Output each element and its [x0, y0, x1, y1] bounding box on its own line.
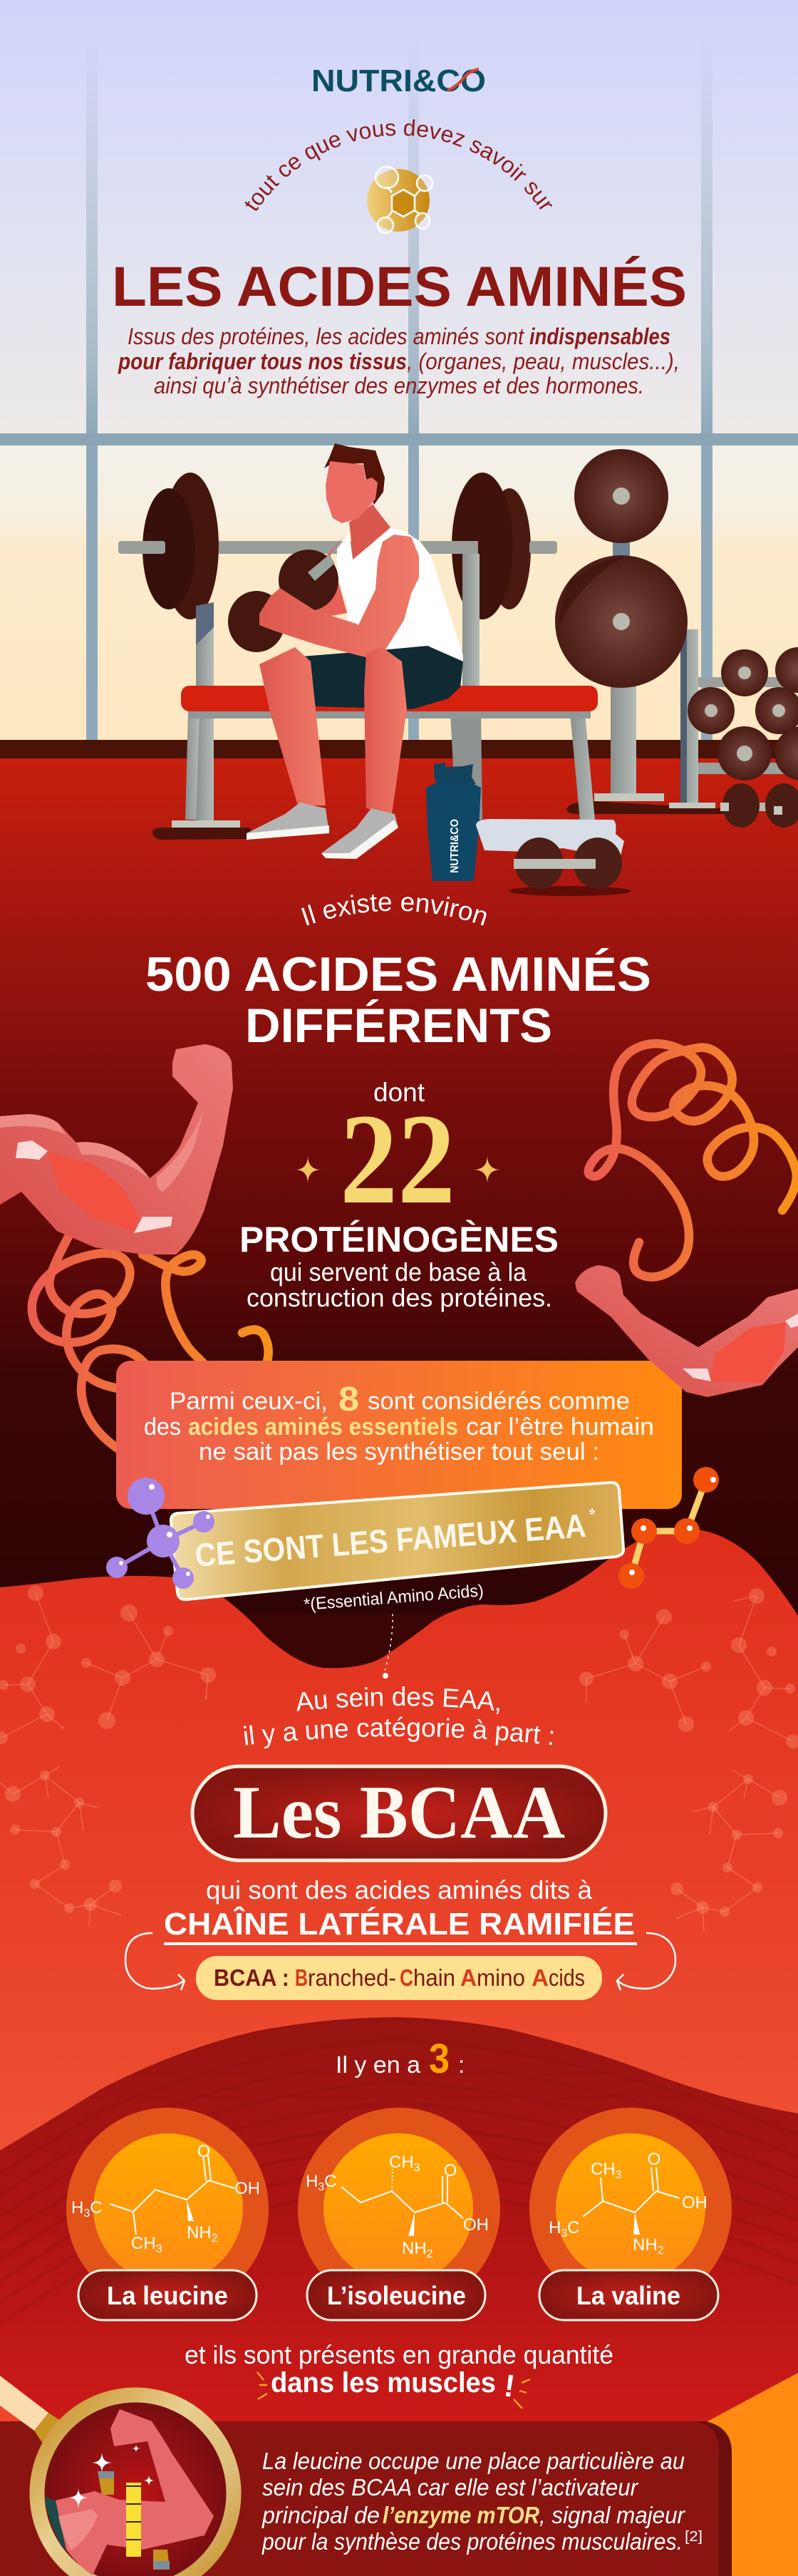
description — [247, 1257, 552, 1312]
BCAA legend pill: C — [400, 1964, 413, 1991]
panel text: ne sait pas les synthétiser tout seul : — [199, 1438, 599, 1465]
magnified arm — [45, 2409, 214, 2575]
left shoe — [247, 803, 329, 840]
red-orange corner left — [0, 2406, 36, 2423]
curved text: au sein des EAA — [244, 1686, 553, 1749]
valine structure: CH — [591, 2160, 616, 2179]
dark red hill — [0, 2017, 798, 2423]
small floor dumbbell — [514, 838, 622, 889]
callout text: principal de — [261, 2502, 380, 2528]
BCAA legend pill: A — [532, 1964, 549, 1991]
panel text: car l’être humain — [466, 1413, 654, 1441]
curved subtitle: tout ce que vous devez savoir sur — [244, 120, 553, 211]
arm muscle — [711, 1322, 786, 1383]
isoleucine structure: O — [444, 2161, 457, 2180]
panel text: acides aminés essentiels — [188, 1413, 458, 1441]
text: dans les muscles — [257, 2367, 530, 2408]
neck — [349, 504, 390, 560]
shaker bottle — [426, 763, 481, 881]
molecule network background — [0, 1585, 798, 1932]
text: acides aminés dits à: qui sont des acides aminés dits à — [206, 1875, 593, 1905]
flexed arm right — [575, 1265, 798, 1397]
heading: chaîne latérale ramifiée: CHAÎNE LATÉRALE RAMIFIÉE — [164, 1906, 635, 1942]
valine label — [539, 2270, 718, 2320]
valine structure: 3 — [561, 2227, 567, 2240]
callout text: sein des BCAA car elle est l’activateur — [262, 2474, 639, 2500]
Les BCAA pill: Les BCAA — [233, 1771, 565, 1854]
intro text: indispensables — [529, 324, 670, 349]
gold banner: CE SONT LES FAMEUX EAA — [194, 1507, 587, 1574]
curved text: au sein des EAA: Au sein des EAA, — [296, 1686, 499, 1714]
protéinogènes: PROTÉINOGÈNES — [239, 1220, 559, 1259]
torso tank top — [337, 528, 463, 663]
sparkles — [68, 2444, 155, 2509]
curved text: au sein des EAA: il y a une catégorie à part : — [244, 1716, 553, 1749]
isoleucine structure: OH — [463, 2215, 489, 2235]
red section blob — [0, 1528, 798, 2423]
BCAA legend pill: BCAA : — [214, 1964, 289, 1991]
near leg — [259, 647, 326, 805]
BCAA legend pill: B — [295, 1964, 308, 1991]
callout text: [2] — [685, 2529, 703, 2545]
valine structure: C — [567, 2218, 580, 2237]
shorts — [293, 646, 463, 709]
barbell — [118, 473, 557, 619]
intro text: , (organes, peau, muscles...), — [407, 349, 680, 374]
panel text: Parmi ceux-ci, — [170, 1388, 328, 1415]
icon: gold molecule — [367, 167, 432, 233]
valine structure: O — [648, 2150, 660, 2169]
gold banner: * — [589, 1504, 596, 1525]
callout text: l’enzyme mTOR — [383, 2502, 539, 2528]
leucine label — [78, 2270, 256, 2320]
panel text — [144, 1381, 654, 1465]
orange corner — [708, 2373, 798, 2576]
leucine structure: 3 — [83, 2207, 90, 2220]
leucine structure — [71, 2142, 260, 2255]
orange info panel — [116, 1361, 682, 1509]
valine label: La valine — [576, 2281, 680, 2310]
valine structure: 3 — [616, 2169, 622, 2181]
man: athlete — [228, 443, 463, 859]
leucine structure: O — [197, 2142, 210, 2161]
squiggle right — [589, 1044, 797, 1277]
logo: NUTRI&CO — [311, 63, 486, 98]
callout text: pour la synthèse des protéines musculaires. — [261, 2528, 683, 2555]
callout text: La leucine occupe une place particulière au — [262, 2448, 685, 2474]
intro text: ainsi qu’à synthétiser des enzymes et des hormones. — [154, 373, 644, 398]
description: qui servent de base à la — [270, 1257, 527, 1287]
isoleucine structure: 3 — [414, 2162, 420, 2174]
window frame — [0, 36, 798, 741]
handle — [0, 2376, 48, 2431]
icon: gold sparkles — [295, 1155, 501, 1184]
isoleucine structure — [306, 2153, 489, 2260]
isoleucine structure: C — [324, 2172, 337, 2191]
isoleucine circle — [298, 2108, 500, 2320]
far leg — [364, 647, 407, 814]
text: il y en a 3 — [336, 2036, 465, 2082]
floor shadows — [152, 801, 727, 896]
front arm — [259, 535, 419, 657]
valine structure: 2 — [658, 2245, 664, 2257]
isoleucine label: L’isoleucine — [327, 2281, 466, 2310]
gym illustration — [118, 443, 798, 896]
gold banner — [171, 1483, 623, 1599]
BCAA legend pill: mino — [477, 1964, 525, 1991]
arm muscle — [48, 1153, 139, 1231]
leucine structure: H — [71, 2198, 83, 2217]
intro text: Issus des protéines, les acides aminés sont — [128, 324, 524, 349]
intro text — [118, 324, 680, 398]
leucine structure: 2 — [212, 2232, 218, 2245]
BCAA legend pill: A — [460, 1964, 477, 1991]
callout text — [261, 2448, 703, 2555]
background: gym window sky — [0, 0, 798, 435]
BCAA legend pill — [196, 1956, 602, 2000]
dotted connector — [383, 1614, 393, 1679]
text: il y en a 3: : — [458, 2051, 465, 2078]
burst strokes — [257, 2372, 530, 2408]
face — [326, 461, 378, 523]
lens — [37, 2395, 234, 2576]
background: gym wall — [0, 442, 798, 741]
valine structure: OH — [682, 2193, 708, 2212]
towel — [476, 819, 624, 859]
heading: 500 acides aminés différents: 500 ACIDES AMINÉS — [145, 947, 651, 1001]
curved text: il existe environ: Il existe environ — [301, 894, 487, 926]
BCAA legend pill: cids — [549, 1964, 585, 1991]
bottom callout panel — [0, 2421, 732, 2576]
BCAA legend pill: hain — [413, 1964, 455, 1991]
panel text: des — [144, 1413, 181, 1441]
BCAA legend pill: ranched- — [308, 1964, 396, 1991]
leucine structure: NH — [187, 2223, 212, 2242]
leucine label: La leucine — [107, 2281, 228, 2310]
leucine structure: C — [90, 2198, 103, 2217]
isoleucine label — [307, 2270, 485, 2320]
isoleucine structure: 3 — [318, 2181, 324, 2193]
description: construction des protéines. — [247, 1283, 552, 1312]
isoleucine structure: H — [306, 2172, 318, 2191]
background: red floor fading to dark — [0, 758, 798, 1614]
text: il y en a 3: Il y en a — [336, 2051, 421, 2078]
flexed arm left — [0, 1044, 233, 1254]
shaker logo: NUTRI&CO — [449, 819, 461, 873]
dumbbell rack — [669, 629, 798, 828]
bench rack posts — [172, 554, 480, 828]
rear arm — [285, 536, 347, 622]
callout text: , signal majeur — [539, 2502, 686, 2528]
panel text: sont considérés comme — [368, 1388, 630, 1415]
title: LES ACIDES AMINÉS — [112, 254, 687, 318]
leucine circle — [66, 2108, 269, 2320]
right shoe — [321, 808, 398, 859]
valine structure: H — [549, 2218, 561, 2237]
text: il y en a 3: 3 — [429, 2036, 450, 2082]
magnifier — [0, 2376, 234, 2576]
text: présents en grande quantité: et ils sont présents en grande quantité — [185, 2340, 613, 2369]
purple molecule — [106, 1478, 214, 1589]
isoleucine structure: NH — [402, 2239, 427, 2258]
valine structure: NH — [633, 2235, 658, 2255]
number 22: 22 — [340, 1088, 455, 1231]
baseboard — [0, 740, 798, 759]
valine structure — [549, 2150, 708, 2257]
arm tendons — [16, 1140, 172, 1233]
intro text: pour fabriquer tous nos tissus — [118, 349, 407, 374]
footnote EAA: *(Essential Amino Acids) — [303, 1581, 484, 1614]
valine circle — [529, 2108, 732, 2320]
bench — [181, 686, 598, 828]
orange molecule — [618, 1467, 719, 1589]
leucine structure: OH — [234, 2179, 260, 2198]
squiggle left — [32, 1235, 269, 1448]
panel text: 8 — [338, 1381, 359, 1418]
heading: 500 acides aminés différents: DIFFÉRENTS — [245, 999, 552, 1053]
isoleucine structure: CH — [389, 2153, 414, 2172]
text: dans les muscles: dans les muscles — [271, 2367, 496, 2399]
plate stand — [555, 449, 688, 801]
text: dans les muscles: ! — [502, 2368, 517, 2404]
arrow left — [125, 1933, 185, 1990]
leucine structure: 3 — [156, 2243, 162, 2255]
heading: 500 acides aminés différents — [145, 947, 651, 1053]
hair — [324, 443, 385, 505]
arm tendons — [683, 1314, 798, 1381]
arrow right — [617, 1933, 675, 1990]
isoleucine structure: 2 — [427, 2248, 433, 2260]
dumbbell in hand — [228, 550, 338, 652]
dont: dont — [373, 1078, 425, 1107]
hill stripes — [0, 2039, 798, 2324]
leucine structure: CH — [131, 2234, 156, 2253]
